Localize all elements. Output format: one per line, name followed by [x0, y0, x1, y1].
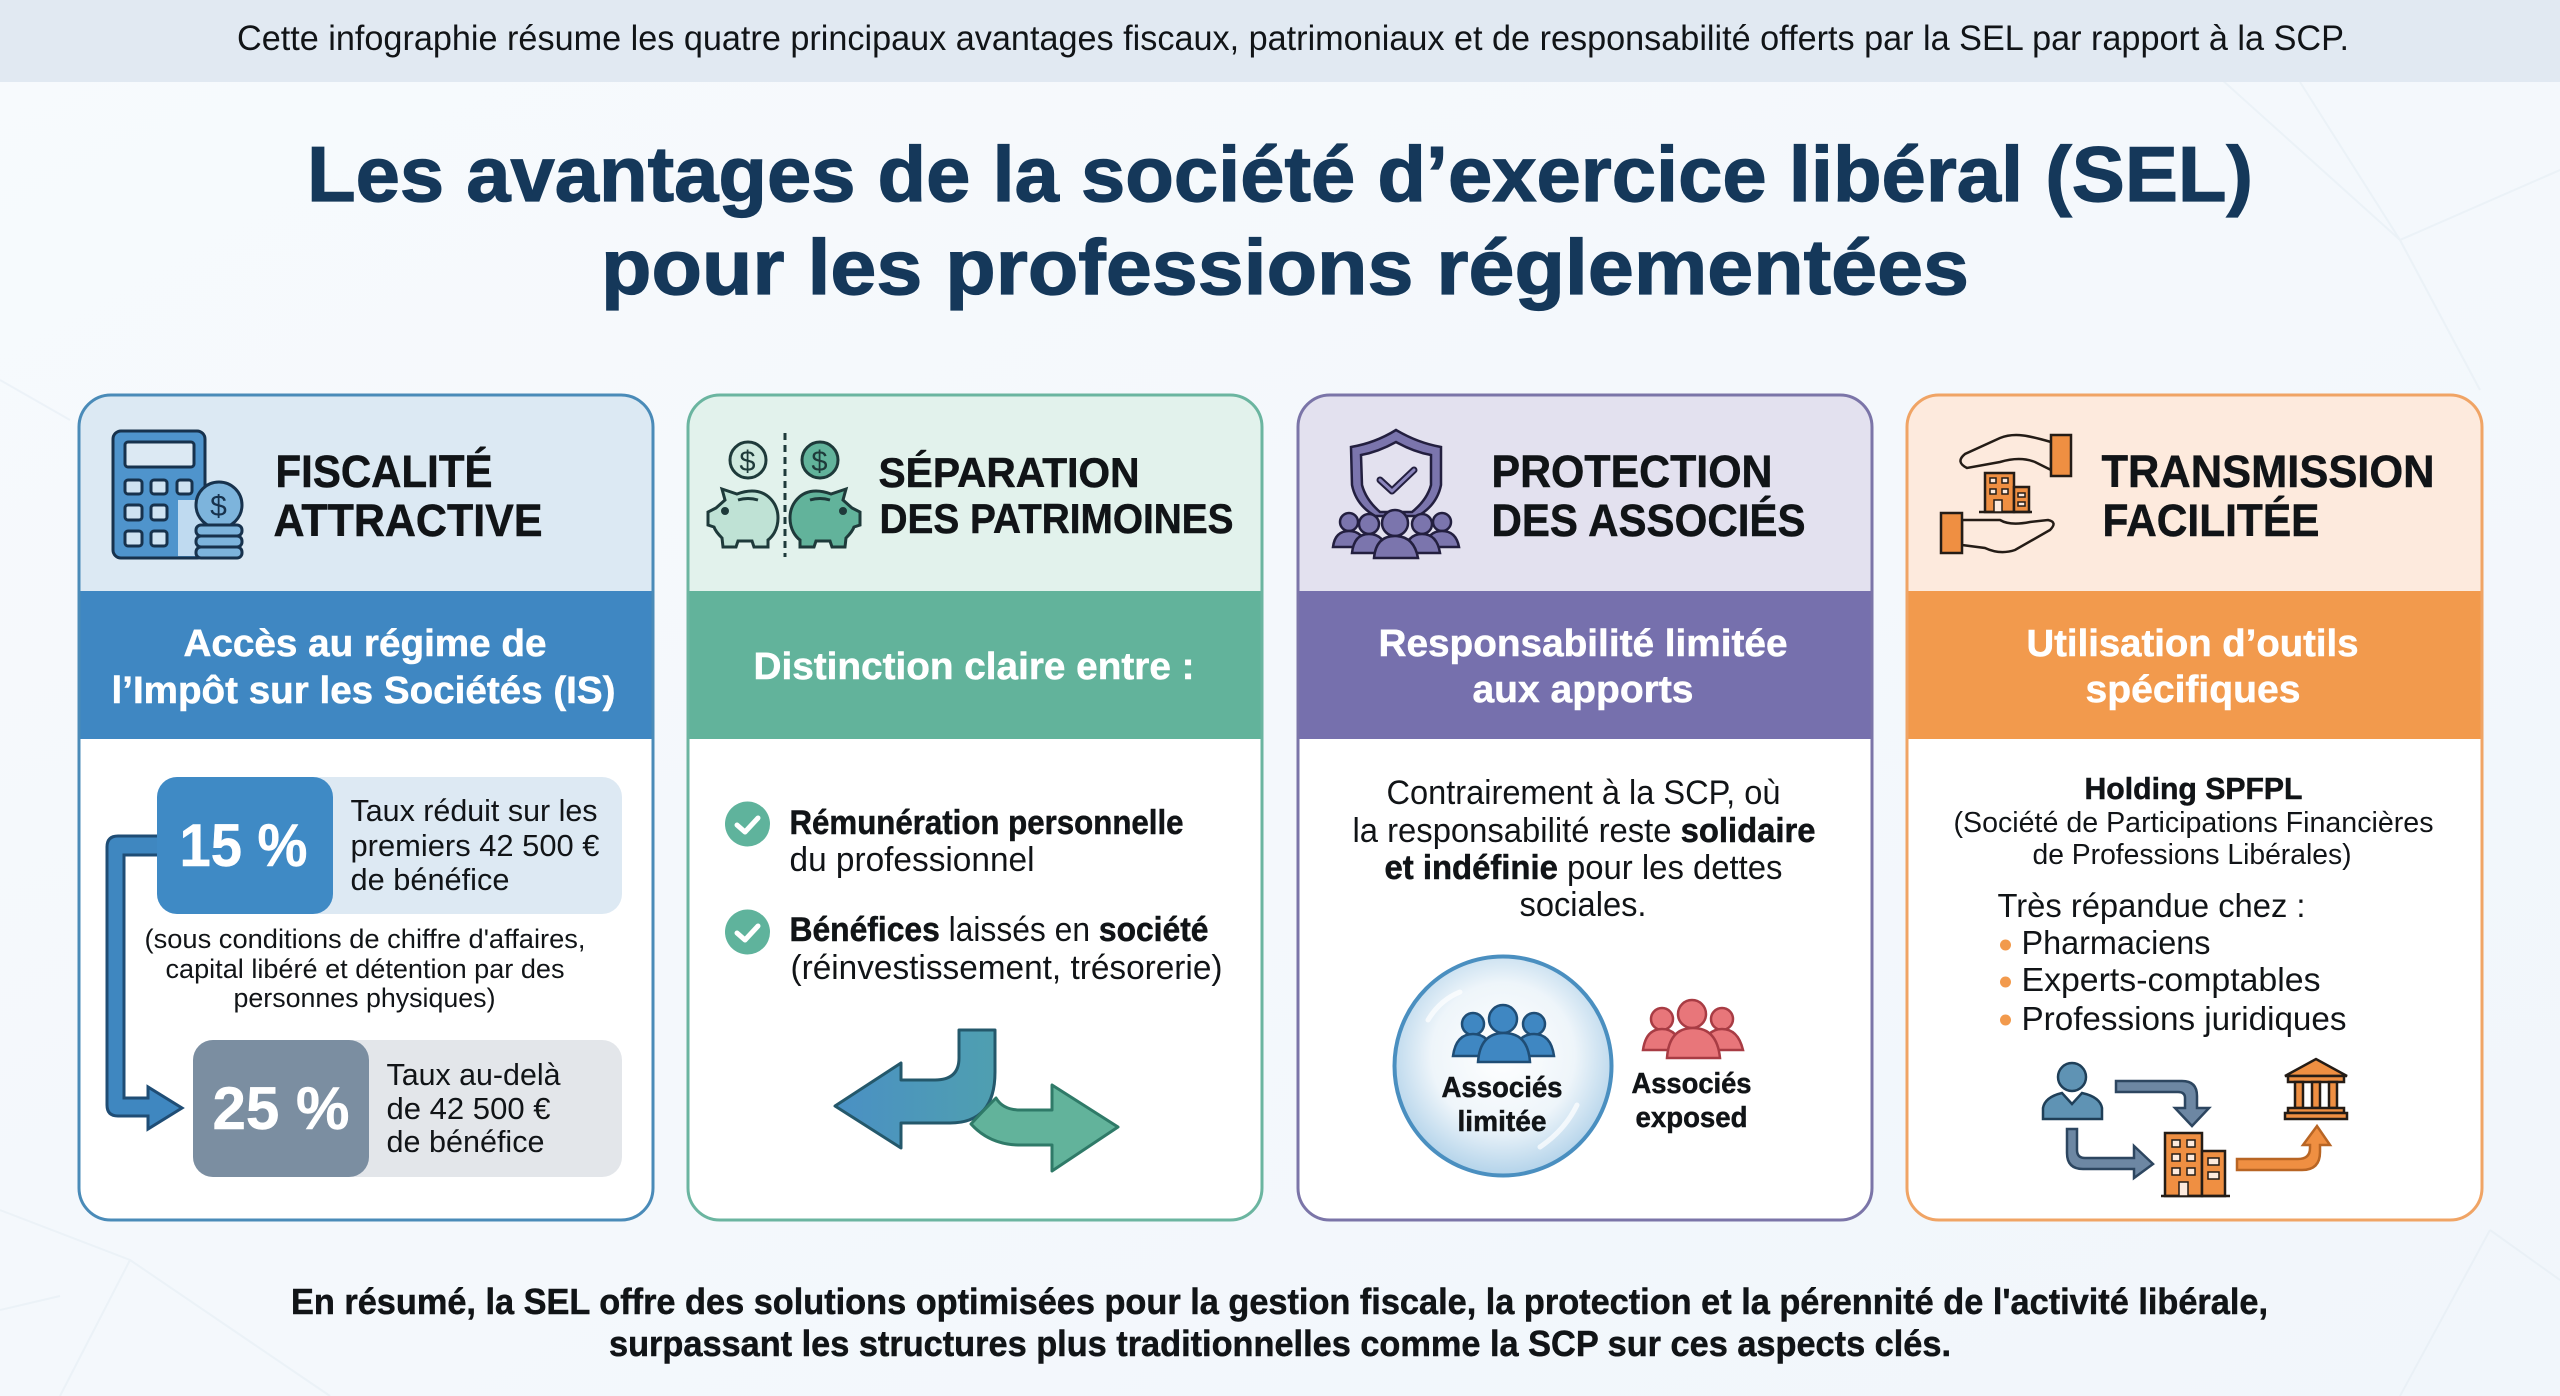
arrow: doctor to holding — [2116, 1081, 2209, 1126]
arrows: diverging blue and green — [835, 1030, 1118, 1171]
summary footer: En résumé, la SEL offre des solutions optimisées pour la gestion fiscale, la protection et la pérennité de l'activité libérale, — [291, 1281, 2268, 1322]
heading — [1492, 446, 1806, 546]
holding text: (Société de Participations Financières — [1954, 807, 2434, 839]
arrow: building to bank — [2237, 1126, 2330, 1170]
check item: bénéfices: (réinvestissement, trésorerie) — [790, 949, 1222, 987]
check item: rémunération — [725, 802, 1184, 879]
body text — [1352, 774, 1816, 924]
title — [307, 130, 2253, 311]
summary footer — [291, 1281, 2268, 1364]
panel: séparation des patrimoines — [688, 395, 1262, 1220]
top banner — [0, 0, 2560, 82]
icon: office building — [2161, 1133, 2230, 1196]
band text: Utilisation d’outils — [2026, 623, 2358, 665]
diagram: holding flow — [2043, 1059, 2347, 1196]
heading: FACILITÉE — [2102, 495, 2320, 546]
top banner: Cette infographie résume les quatre principaux avantages fiscaux, patrimoniaux et de responsabilité offerts par la SEL par rapport à la SCP. — [237, 19, 2349, 58]
protected bubble: Associés — [1442, 1072, 1562, 1104]
list of professions — [1998, 887, 2346, 1037]
list of professions: Experts-comptables — [2022, 961, 2320, 998]
holding text: Holding SPFPL — [2084, 771, 2302, 806]
band text: Distinction claire entre : — [754, 646, 1194, 688]
icon: two piggy banks — [708, 433, 860, 557]
protected bubble: limitée — [1458, 1106, 1546, 1138]
list of professions: Très répandue chez : — [1998, 887, 2306, 924]
rate: 25 % — [193, 1040, 622, 1177]
card band — [79, 591, 653, 739]
body text: sociales. — [1520, 886, 1646, 924]
card band — [688, 591, 1262, 739]
icon: two piggy banks: $ — [739, 446, 756, 478]
rate: 15 %: de bénéfice — [350, 862, 510, 897]
protected bubble — [1394, 956, 1612, 1176]
holding text — [1954, 771, 2434, 871]
icon: red people — [1643, 1000, 1743, 1058]
holding text: de Professions Libérales) — [2032, 839, 2352, 871]
icon: calculator and coins: $ — [210, 490, 227, 523]
band text — [2026, 623, 2358, 711]
title: Les avantages de la société d’exercice libéral (SEL) — [307, 130, 2253, 218]
rate: 25 %: Taux au-delà — [386, 1057, 561, 1092]
heading: ATTRACTIVE — [274, 495, 542, 546]
band text: aux apports — [1472, 669, 1694, 711]
heading: DES PATRIMOINES — [880, 495, 1234, 542]
heading: TRANSMISSION — [2102, 446, 2434, 497]
heading: PROTECTION — [1492, 446, 1772, 497]
heading: FISCALITÉ — [276, 446, 492, 497]
heading — [274, 446, 542, 546]
check item: bénéfices: Bénéfices laissés en société — [790, 911, 1208, 949]
icon: shield and people — [1333, 430, 1459, 558]
rate: 15 %: premiers 42 500 € — [350, 828, 600, 863]
card header background — [1907, 395, 2482, 591]
conditions note: personnes physiques) — [234, 983, 496, 1013]
title: pour les professions réglementées — [601, 223, 1969, 311]
conditions note: (sous conditions de chiffre d'affaires, — [144, 924, 586, 954]
band text: Responsabilité limitée — [1378, 623, 1788, 665]
rate: 15 %: Taux réduit sur les — [350, 793, 598, 828]
conditions note: capital libéré et détention par des — [166, 954, 564, 984]
icon: doctor — [2043, 1063, 2102, 1119]
band text — [112, 623, 616, 712]
exposed associates — [1632, 1000, 1752, 1134]
list of professions: Pharmaciens — [2022, 924, 2210, 961]
band text — [1378, 623, 1788, 711]
exposed associates: exposed — [1636, 1102, 1748, 1134]
check item: rémunération: Rémunération personnelle — [790, 804, 1184, 842]
icon: hands holding building — [1941, 435, 2071, 553]
rate: 25 %: 25 % — [212, 1075, 350, 1142]
card header background — [79, 395, 653, 591]
panel: fiscalité attractive — [79, 395, 653, 1220]
icon: calculator and coins — [113, 431, 242, 558]
icon: bank — [2285, 1059, 2347, 1119]
summary footer: surpassant les structures plus traditionnelles comme la SCP sur ces aspects clés. — [609, 1323, 1951, 1364]
rate: 25 %: de bénéfice — [386, 1124, 544, 1159]
check item: rémunération: du professionnel — [790, 841, 1034, 879]
icon: two piggy banks: $ — [811, 446, 828, 478]
band text: Accès au régime de — [184, 623, 546, 665]
icon: blue people — [1453, 1005, 1554, 1062]
heading — [2102, 446, 2434, 546]
rate: 15 % — [157, 777, 622, 914]
rate: 25 %: de 42 500 € — [386, 1091, 550, 1126]
card header background — [688, 395, 1262, 591]
body text: Contrairement à la SCP, où — [1386, 774, 1780, 812]
heading: SÉPARATION — [878, 449, 1140, 496]
list of professions: Professions juridiques — [2022, 1000, 2346, 1037]
check item: bénéfices — [725, 910, 1222, 987]
card band — [1298, 591, 1872, 739]
panel: transmission facilitée — [1907, 395, 2482, 1220]
band text: spécifiques — [2086, 669, 2300, 711]
exposed associates: Associés — [1632, 1068, 1752, 1100]
card header background — [1298, 395, 1872, 591]
arrow: doctor to building — [2067, 1129, 2153, 1178]
heading — [878, 449, 1234, 542]
card band — [1907, 591, 2482, 739]
rate: 15 %: 15 % — [180, 812, 308, 879]
band text: l’Impôt sur les Sociétés (IS) — [112, 670, 616, 712]
panel: protection des associés — [1298, 395, 1872, 1220]
body text: et indéfinie pour les dettes — [1384, 849, 1782, 887]
heading: DES ASSOCIÉS — [1492, 495, 1806, 546]
body text: la responsabilité reste solidaire — [1352, 812, 1816, 850]
conditions note — [144, 924, 586, 1013]
arrow: 15 to 25 percent — [107, 836, 182, 1129]
